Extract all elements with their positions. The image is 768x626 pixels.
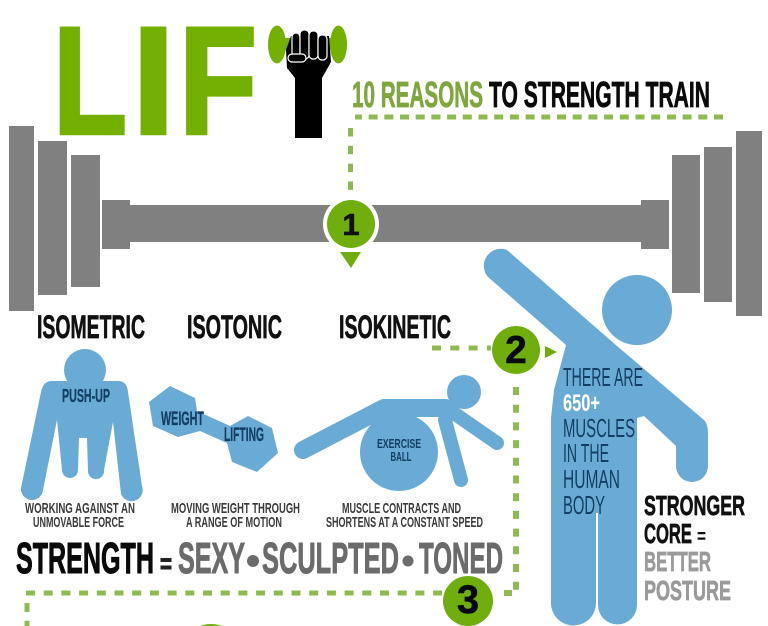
stronger core text [644, 490, 745, 606]
figure: human body with raised arm: IN THE [563, 438, 609, 468]
caption: isotonic [171, 500, 300, 531]
dashed connector: step 3 to 4 [26, 593, 445, 626]
icon: fist holding dumbbell [268, 26, 347, 138]
stronger core text: BETTER [644, 546, 711, 577]
step 1 badge [323, 196, 379, 268]
caption: isotonic: A RANGE OF MOTION [186, 514, 282, 531]
dashed connector: title to step 1 [350, 117, 723, 195]
figure: dumbbell: LIFTING [224, 425, 264, 446]
caption: isokinetic [326, 500, 483, 531]
strength equation: SCULPTED [262, 534, 399, 583]
caption: isometric: WORKING AGAINST AN [25, 500, 135, 517]
caption: isokinetic: MUSCLE CONTRACTS AND [342, 500, 461, 517]
subtitle: 10 reasons to strength train [352, 74, 710, 115]
heading: isotonic: ISOTONIC [187, 309, 282, 345]
caption: isotonic: MOVING WEIGHT THROUGH [171, 500, 300, 517]
step 2 badge: 2 [505, 329, 527, 372]
step 4 badge (cropped) [200, 624, 222, 626]
stronger core text: CORE [644, 518, 692, 549]
caption: isometric [25, 500, 135, 531]
dashed connector: step 1 to 2 [432, 346, 491, 350]
dashed connector: step 2 to 3 [504, 387, 516, 593]
title: LIF: I [132, 0, 175, 166]
figure: dumbbell: WEIGHT [161, 409, 204, 430]
heading: isometric: ISOMETRIC [37, 309, 145, 345]
strength equation: = [160, 548, 172, 579]
heading: isokinetic: ISOKINETIC [339, 309, 451, 345]
figure: push-up: PUSH-UP [62, 386, 110, 406]
figure: human body with raised arm: BODY [563, 490, 605, 520]
subtitle: 10 reasons to strength train: 10 REASONS [352, 74, 483, 115]
figure: human body with raised arm: 650+ [563, 390, 600, 417]
barbell [9, 126, 762, 316]
title: LIF: L [53, 0, 127, 166]
step 3 badge [443, 576, 493, 626]
step 3 badge: 3 [457, 578, 479, 622]
title: LIF: F [179, 0, 257, 166]
strength equation: STRENGTH [16, 534, 154, 583]
figure: human body with raised arm: MUSCLES [563, 413, 635, 443]
figure: push-up [21, 349, 143, 501]
figure: human body with raised arm: HUMAN [563, 464, 620, 494]
figure: human body with raised arm: THERE ARE [563, 362, 643, 392]
caption: isometric: UNMOVABLE FORCE [33, 514, 124, 531]
stronger core text: = [697, 526, 706, 548]
figure: dumbbell [149, 386, 278, 472]
figure: exercise ball [303, 375, 497, 491]
title: LIF [53, 0, 257, 166]
step 2 badge [492, 326, 557, 374]
figure: exercise ball: EXERCISE [377, 436, 421, 451]
step 1 badge: 1 [342, 207, 360, 242]
figure: exercise ball: BALL [390, 449, 412, 464]
figure: human body with raised arm [484, 249, 708, 626]
caption: isokinetic: SHORTENS AT A CONSTANT SPEED [326, 514, 483, 531]
strength equation: SEXY [178, 534, 245, 583]
strength equation [16, 534, 503, 583]
strength equation: TONED [419, 534, 503, 583]
